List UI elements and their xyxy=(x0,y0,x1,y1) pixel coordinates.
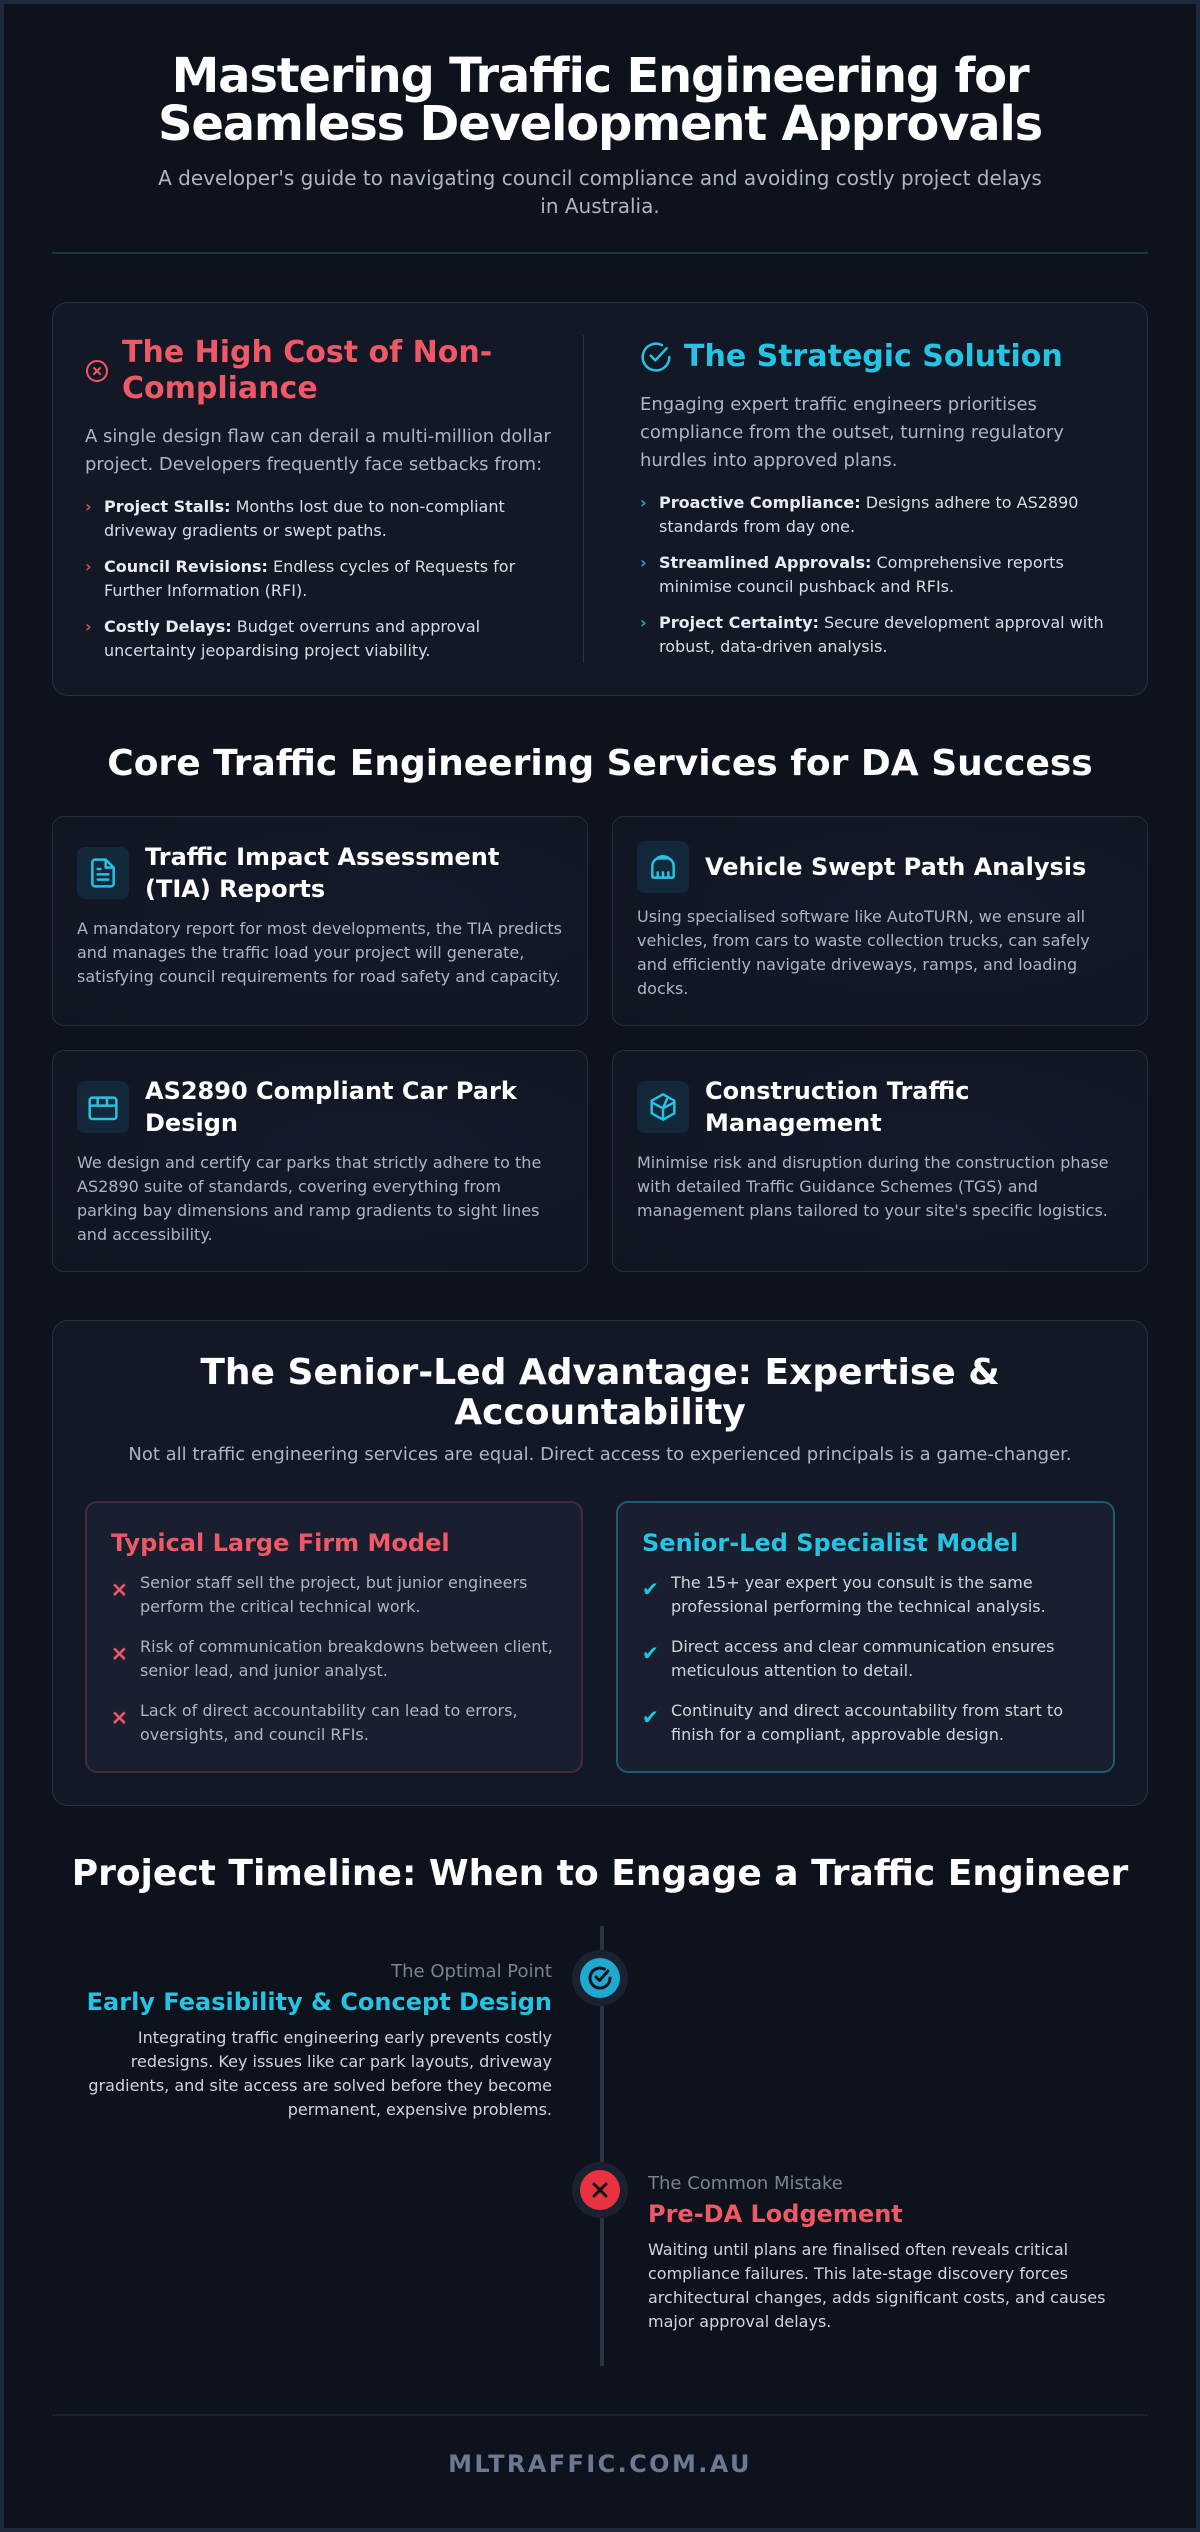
subtitle: A developer's guide to navigating council compliance and avoiding costly project delays xyxy=(158,166,1042,190)
card description: and accessibility. xyxy=(77,1225,213,1244)
list item: oversights, and council RFIs. xyxy=(140,1725,369,1744)
card description xyxy=(77,919,562,986)
card: traffic impact assessment xyxy=(52,816,588,1026)
bullet: streamlined approvals: minimise council pushback and RFIs. xyxy=(659,577,954,596)
check mark: ✔ xyxy=(642,1641,659,1665)
check mark: ✔ xyxy=(642,1705,659,1729)
icon: document xyxy=(77,847,129,899)
card heading: Senior-Led Specialist Model xyxy=(642,1529,1018,1557)
list item: meticulous attention to detail. xyxy=(671,1661,913,1680)
bullet: costly delays: Costly Delays: Budget overruns and approval xyxy=(104,617,480,636)
bullet marker: › xyxy=(640,613,647,632)
card description: Minimise risk and disruption during the construction phase xyxy=(637,1153,1108,1172)
check mark: ✔ xyxy=(642,1577,659,1601)
intro text xyxy=(85,426,551,475)
card title: Vehicle Swept Path Analysis xyxy=(705,853,1086,881)
card description: and efficiently navigate driveways, ramps, and loading xyxy=(637,955,1077,974)
bullet: project certainty: robust, data-driven analysis. xyxy=(659,637,888,656)
card description xyxy=(637,1153,1108,1220)
card description: and manages the traffic load your project will generate, xyxy=(77,943,524,962)
icon: check circle xyxy=(641,342,671,372)
comparison card: typical large firm xyxy=(85,1501,583,1773)
bullet: streamlined approvals: Streamlined Approvals: Comprehensive reports xyxy=(659,553,1064,572)
timeline text: early feasibility xyxy=(87,1961,552,2119)
intro text: compliance from the outset, turning regulatory xyxy=(640,422,1064,443)
heading: project timeline: Project Timeline: When to Engage a Traffic Engineer xyxy=(72,1853,1128,1894)
list item: perform the critical technical work. xyxy=(140,1597,421,1616)
list item xyxy=(671,1637,1054,1680)
bullet: proactive compliance: Proactive Compliance: Designs adhere to AS2890 xyxy=(659,493,1078,512)
card: construction traffic management xyxy=(612,1050,1148,1272)
icon: car park xyxy=(77,1081,129,1133)
card title xyxy=(145,1077,518,1137)
stage label: The Common Mistake xyxy=(648,2173,843,2194)
card description: docks. xyxy=(637,979,688,998)
cross mark: ✕ xyxy=(111,1642,128,1666)
list item: Direct access and clear communication ensures xyxy=(671,1637,1054,1656)
panel: senior-led advantage xyxy=(52,1320,1148,1806)
card description xyxy=(637,907,1090,998)
intro text: hurdles into approved plans. xyxy=(640,450,897,471)
column divider xyxy=(583,335,584,663)
intro text: Engaging expert traffic engineers prioritises xyxy=(640,394,1037,415)
stage description xyxy=(88,2028,552,2119)
header divider xyxy=(52,252,1148,254)
card heading: Typical Large Firm Model xyxy=(111,1529,450,1557)
card description: We design and certify car parks that strictly adhere to the xyxy=(77,1153,541,1172)
card: swept path analysis xyxy=(612,816,1148,1026)
bullet: streamlined approvals xyxy=(659,553,1064,596)
heading: strategic solution: The Strategic Solution xyxy=(684,339,1063,374)
card description: satisfying council requirements for road safety and capacity. xyxy=(77,967,561,986)
bullet: council revisions: Council Revisions: Endless cycles of Requests for xyxy=(104,557,515,576)
title: Seamless Development Approvals xyxy=(158,96,1042,152)
stage title: Pre-DA Lodgement xyxy=(648,2200,903,2228)
icon: swept path xyxy=(637,841,689,893)
heading: core services: Core Traffic Engineering Services for DA Success xyxy=(107,743,1093,784)
title: Mastering Traffic Engineering for xyxy=(172,48,1028,104)
list item: professional performing the technical analysis. xyxy=(671,1597,1046,1616)
bullet marker: › xyxy=(85,617,92,636)
intro text xyxy=(640,394,1064,471)
bullet: project stalls: driveway gradients or swept paths. xyxy=(104,521,387,540)
timeline node: common mistake xyxy=(572,2162,628,2218)
subtitle xyxy=(158,166,1042,218)
card title: AS2890 Compliant Car Park xyxy=(145,1077,517,1105)
card: car park design xyxy=(52,1050,588,1272)
card title xyxy=(145,843,499,903)
timeline line xyxy=(600,1926,604,2366)
list item: Senior staff sell the project, but junior engineers xyxy=(140,1573,527,1592)
card description: vehicles, from cars to waste collection trucks, can safely xyxy=(637,931,1090,950)
title xyxy=(158,48,1042,152)
stage description: architectural changes, adds significant costs, and causes xyxy=(648,2288,1105,2307)
list item xyxy=(140,1637,553,1680)
card description: AS2890 suite of standards, covering everything from xyxy=(77,1177,501,1196)
timeline text: pre-DA lodgement xyxy=(648,2173,1105,2331)
stage title: Early Feasibility & Concept Design xyxy=(87,1988,552,2016)
list item: Lack of direct accountability can lead to errors, xyxy=(140,1701,518,1720)
subheading: Not all traffic engineering services are equal. Direct access to experienced principals is a game-changer. xyxy=(128,1444,1072,1465)
card description: A mandatory report for most developments, the TIA predicts xyxy=(77,919,562,938)
heading: senior-led advantage xyxy=(200,1352,1000,1433)
timeline node: optimal point xyxy=(572,1950,628,2006)
bullet: council revisions: Further Information (RFI). xyxy=(104,581,307,600)
list item xyxy=(140,1701,518,1744)
bullet marker: › xyxy=(640,493,647,512)
header xyxy=(52,48,1148,254)
bullet: proactive compliance xyxy=(659,493,1078,536)
list item xyxy=(140,1573,527,1616)
heading: senior-led advantage: The Senior-Led Advantage: Expertise & xyxy=(200,1352,1000,1393)
list item: senior lead, and junior analyst. xyxy=(140,1661,388,1680)
stage description: permanent, expensive problems. xyxy=(288,2100,552,2119)
bullet list: benefits xyxy=(640,493,1104,656)
card title: Traffic Impact Assessment xyxy=(145,843,499,871)
stage description: Waiting until plans are finalised often reveals critical xyxy=(648,2240,1068,2259)
bullet list: setbacks xyxy=(85,497,516,660)
card description xyxy=(77,1153,541,1244)
node disc and icon xyxy=(580,1958,620,1998)
heading: high cost: Compliance xyxy=(122,371,318,406)
bullet: costly delays xyxy=(104,617,480,660)
card title: (TIA) Reports xyxy=(145,875,325,903)
intro text: project. Developers frequently face setbacks from: xyxy=(85,454,542,475)
card title: Management xyxy=(705,1109,882,1137)
heading: senior-led advantage: Accountability xyxy=(454,1392,746,1433)
list item: finish for a compliant, approvable design. xyxy=(671,1725,1004,1744)
card title xyxy=(705,1077,969,1137)
list item xyxy=(671,1701,1063,1744)
icon: cube xyxy=(637,1081,689,1133)
comparison card: senior-led specialist xyxy=(616,1501,1115,1773)
list item xyxy=(670,1573,1046,1616)
footer xyxy=(52,2414,1148,2480)
bullet marker: › xyxy=(85,557,92,576)
intro text: A single design flaw can derail a multi-million dollar xyxy=(85,426,551,447)
list item: Risk of communication breakdowns between client, xyxy=(140,1637,553,1656)
node disc and icon xyxy=(580,2170,620,2210)
panel: cost versus solution xyxy=(52,302,1148,696)
stage description: compliance failures. This late-stage discovery forces xyxy=(648,2264,1068,2283)
card description: with detailed Traffic Guidance Schemes (TGS) and xyxy=(637,1177,1038,1196)
bullet: project certainty xyxy=(659,613,1104,656)
cross mark: ✕ xyxy=(111,1706,128,1730)
footer website: MLTRAFFIC.COM.AU xyxy=(448,2450,752,2478)
bullet: project stalls: Project Stalls: Months lost due to non-compliant xyxy=(104,497,505,516)
bullet: project certainty: Project Certainty: Secure development approval with xyxy=(659,613,1104,632)
card description: management plans tailored to your site's specific logistics. xyxy=(637,1201,1108,1220)
card description: Using specialised software like AutoTURN, we ensure all xyxy=(637,907,1085,926)
subtitle: in Australia. xyxy=(540,194,660,218)
card description: parking bay dimensions and ramp gradients to sight lines xyxy=(77,1201,539,1220)
bullet marker: › xyxy=(640,553,647,572)
list item: Continuity and direct accountability from start to xyxy=(671,1701,1063,1720)
stage label: The Optimal Point xyxy=(391,1961,552,1982)
card title: Construction Traffic xyxy=(705,1077,969,1105)
heading: high cost xyxy=(122,335,492,406)
stage description: Integrating traffic engineering early prevents costly xyxy=(138,2028,552,2047)
timeline xyxy=(87,1926,1105,2366)
column: strategic solution xyxy=(640,339,1104,656)
bullet marker: › xyxy=(85,497,92,516)
list item: The 15+ year expert you consult is the same xyxy=(671,1573,1033,1592)
bullet: costly delays: uncertainty jeopardising project viability. xyxy=(104,641,430,660)
card title: Design xyxy=(145,1109,238,1137)
stage description: gradients, and site access are solved before they become xyxy=(88,2076,552,2095)
bullet: project stalls xyxy=(104,497,505,540)
stage description xyxy=(648,2240,1105,2331)
column: high cost of non-compliance xyxy=(85,335,551,660)
icon: x circle xyxy=(86,360,108,382)
heading: high cost: The High Cost of Non- xyxy=(122,335,492,370)
stage description: major approval delays. xyxy=(648,2312,831,2331)
stage description: redesigns. Key issues like car park layouts, driveway xyxy=(131,2052,552,2071)
bullet: council revisions xyxy=(104,557,516,600)
bullet: proactive compliance: standards from day one. xyxy=(659,517,855,536)
cross mark: ✕ xyxy=(111,1578,128,1602)
